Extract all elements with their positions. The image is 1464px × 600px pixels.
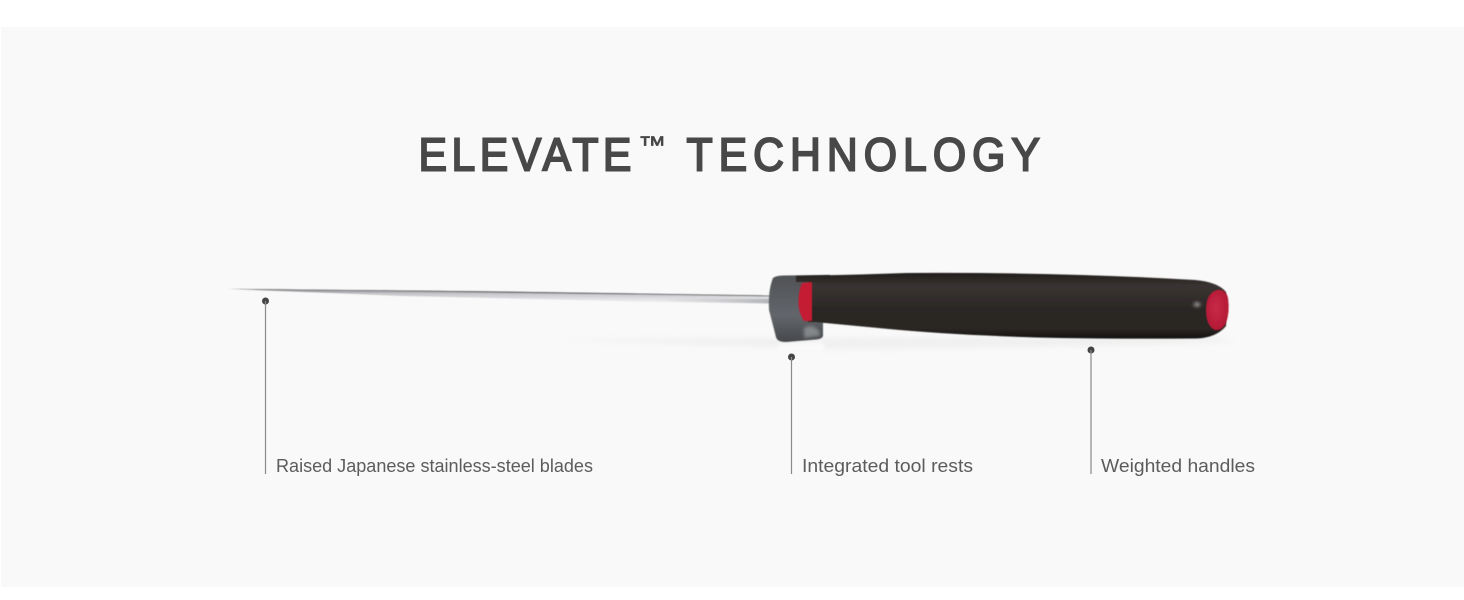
callout: tool rests: Integrated tool rests bbox=[802, 455, 973, 476]
title: ELEVATE bbox=[418, 130, 631, 181]
callout: handles: Weighted handles bbox=[1101, 455, 1255, 476]
tool rest guard bbox=[769, 275, 830, 342]
title: ™ bbox=[638, 132, 666, 159]
handle bbox=[796, 273, 1226, 339]
red end cap bbox=[1206, 290, 1229, 330]
callout: handles bbox=[1088, 346, 1255, 476]
blade bbox=[228, 289, 770, 304]
reflection under tool rest bbox=[778, 342, 824, 350]
title: TECHNOLOGY bbox=[686, 130, 1040, 181]
red collar bbox=[798, 282, 812, 321]
callout: blades: Raised Japanese stainless-steel blades bbox=[276, 455, 593, 476]
knife illustration bbox=[228, 273, 1236, 350]
callout: blades bbox=[262, 298, 593, 476]
handle glint bbox=[1194, 302, 1200, 307]
title bbox=[418, 130, 1040, 181]
knife shadow bbox=[560, 337, 1236, 349]
callout: tool rests bbox=[788, 354, 973, 476]
tool rest highlight bbox=[804, 326, 820, 338]
